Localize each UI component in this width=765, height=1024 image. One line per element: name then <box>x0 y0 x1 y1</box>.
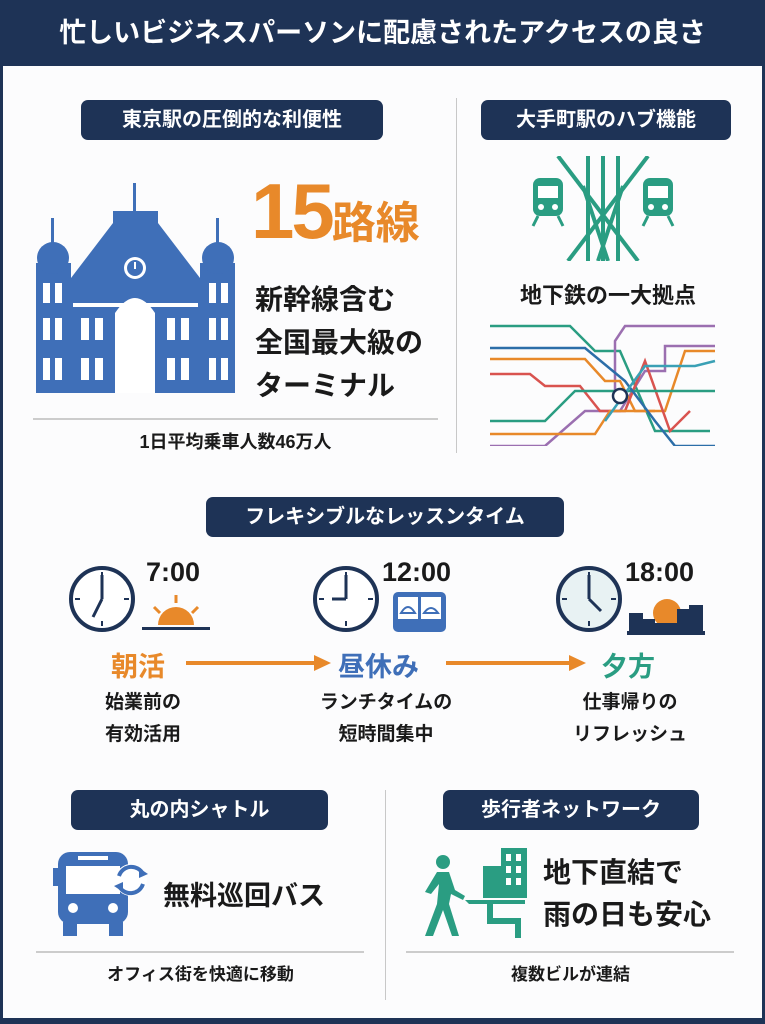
text: evening desc: リフレッシュ <box>573 724 687 745</box>
text: lunch desc: ランチタイムの <box>320 692 452 713</box>
panel: Tokyo station <box>33 100 438 452</box>
heading: pedestrian <box>443 790 699 830</box>
clock: 7:00: 7:00 <box>146 557 200 587</box>
label: morning: 朝活 <box>111 652 165 682</box>
icon: walker with buildings <box>425 848 527 938</box>
arrow: noon to evening <box>446 655 586 671</box>
clock: 12:00: 12:00 <box>382 557 451 587</box>
chart: metro lines <box>490 324 716 446</box>
icon: bus <box>53 852 148 936</box>
title bar: 忙しいビジネスパーソンに配慮されたアクセスの良さ <box>59 18 706 48</box>
label: evening: 夕方 <box>601 652 655 682</box>
icon: station building <box>36 183 235 393</box>
text: underground connection: 地下直結で <box>543 857 683 888</box>
heading: Otemachi: 大手町駅のハブ機能 <box>516 109 696 131</box>
panel: Otemachi hub <box>481 100 731 446</box>
text: buildings linked: 複数ビルが連結 <box>511 965 630 984</box>
text: free bus: 無料巡回バス <box>163 881 325 911</box>
clock: 18:00: 18:00 <box>625 557 694 587</box>
arrow: morning to noon <box>186 655 331 671</box>
text: daily passengers: 1日平均乗車人数46万人 <box>139 432 332 452</box>
text: morning desc <box>105 692 181 745</box>
heading: shuttle <box>71 790 328 830</box>
section: flexible lesson time <box>69 497 705 745</box>
text: terminal description <box>255 284 423 401</box>
text: terminal description: 全国最大級の <box>255 327 423 358</box>
icon: train hub <box>532 156 674 261</box>
text: lunch desc <box>320 692 452 745</box>
text: morning desc: 有効活用 <box>105 724 181 745</box>
title bar <box>0 0 765 66</box>
heading: Otemachi <box>481 100 731 140</box>
panel: Marunouchi shuttle <box>36 790 364 984</box>
heading: Tokyo station: 東京駅の圧倒的な利便性 <box>122 109 342 131</box>
label: lunch: 昼休み <box>338 652 419 682</box>
text: evening desc <box>573 692 687 745</box>
clock: 18:00 <box>556 557 705 635</box>
heading: Tokyo station <box>81 100 383 140</box>
heading: shuttle: 丸の内シャトル <box>130 799 270 821</box>
big number: 15 lines: 15路線 <box>251 167 420 255</box>
clock: 12:00 <box>313 557 451 632</box>
text: underground connection: 雨の日も安心 <box>543 899 711 930</box>
text: evening desc: 仕事帰りの <box>582 692 678 713</box>
clock: 7:00 <box>69 557 210 632</box>
heading: flexible lesson time <box>206 497 564 537</box>
divider vertical top <box>456 98 457 453</box>
text: subway hub: 地下鉄の一大拠点 <box>520 283 696 308</box>
text: morning desc: 始業前の <box>105 692 181 713</box>
heading: flexible lesson time: フレキシブルなレッスンタイム <box>245 506 525 528</box>
heading: pedestrian: 歩行者ネットワーク <box>481 799 661 821</box>
text: terminal description: 新幹線含む <box>255 284 395 315</box>
text: lunch desc: 短時間集中 <box>338 724 434 745</box>
divider vertical bottom <box>385 790 386 1000</box>
text: terminal description: ターミナル <box>255 370 395 401</box>
text: office district: オフィス街を快適に移動 <box>107 965 294 984</box>
panel: pedestrian network <box>406 790 734 984</box>
text: underground connection <box>543 857 711 930</box>
